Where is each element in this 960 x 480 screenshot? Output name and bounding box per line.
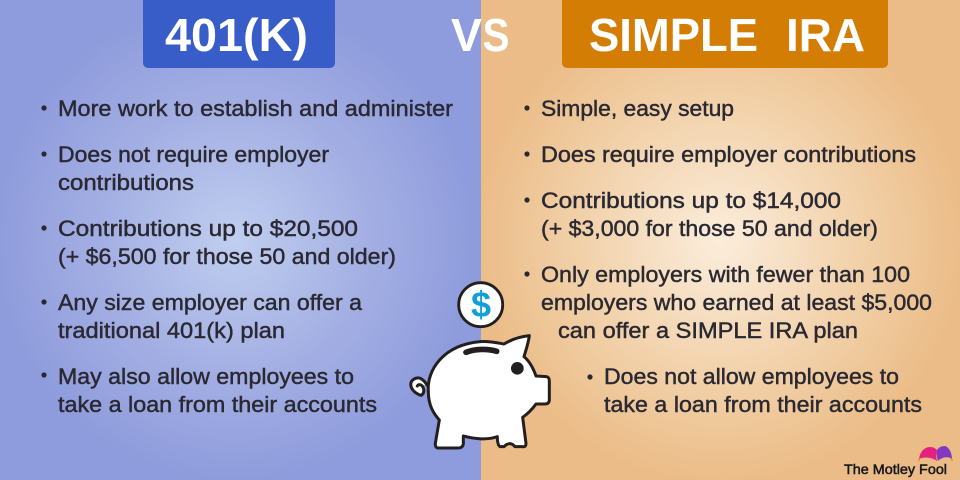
bullet: employer size [41, 290, 363, 343]
bullet: loans: take a loan from their accounts [58, 392, 377, 417]
bullet: employer size: Any size employer can offer a [58, 290, 363, 315]
bullet: employer size: employers who earned at least $5,000 [541, 290, 932, 315]
logo: The Motley Fool: The Motley Fool [844, 461, 947, 477]
heading: VS: V [451, 9, 482, 61]
heading: SIMPLE IRA: IRA [786, 9, 865, 61]
heading: SIMPLE IRA [562, 0, 888, 68]
icon: piggy bank [411, 336, 549, 448]
icon: dollar coin: $ [471, 284, 491, 325]
bullet: loans [587, 364, 922, 417]
bullet: contribution limit: Contributions up to $20,500 [58, 216, 358, 241]
heading: 401(k) [143, 0, 335, 68]
bullet: employer size [524, 262, 932, 343]
bullet: contribution limit [41, 216, 396, 269]
heading: VS: S [482, 9, 510, 61]
bullet: employer contributions [41, 142, 329, 195]
icon: dollar coin [459, 283, 503, 327]
icon: jester hat [918, 446, 953, 461]
bullet: employer contributions: Does require employer contributions [541, 142, 916, 167]
bullet: employer contributions: Does not require employer [58, 142, 329, 167]
panel: SIMPLE IRA background [481, 0, 960, 480]
panel: 401(k) list [41, 96, 453, 417]
panel: SIMPLE IRA list [524, 96, 932, 417]
bullet: establish: More work to establish and administer [58, 96, 453, 121]
bullet: employer size: traditional 401(k) plan [58, 318, 285, 343]
heading: 401(k): 401(K) [165, 9, 308, 61]
bullet: contribution limit: Contributions up to $14,000 [541, 188, 841, 213]
bullet: contribution limit: (+ $3,000 for those 50 and older) [541, 216, 878, 241]
bullet: loans [41, 364, 377, 417]
bullet: employer contributions: contributions [58, 170, 194, 195]
bullet: setup: Simple, easy setup [541, 96, 734, 121]
heading: SIMPLE IRA: SIMPLE [589, 9, 758, 61]
panel: 401(k) background [0, 0, 481, 480]
bullet: contribution limit [524, 188, 878, 241]
bullet: contribution limit: (+ $6,500 for those 50 and older) [58, 244, 396, 269]
bullet: loans: Does not allow employees to [604, 364, 899, 389]
bullet: employer size: can offer a SIMPLE IRA plan [558, 318, 858, 343]
bullet: loans: May also allow employees to [58, 364, 354, 389]
logo: The Motley Fool [844, 446, 953, 477]
bullet: loans: take a loan from their accounts [604, 392, 922, 417]
heading: VS [451, 9, 510, 61]
bullet: employer size: Only employers with fewer than 100 [541, 262, 910, 287]
